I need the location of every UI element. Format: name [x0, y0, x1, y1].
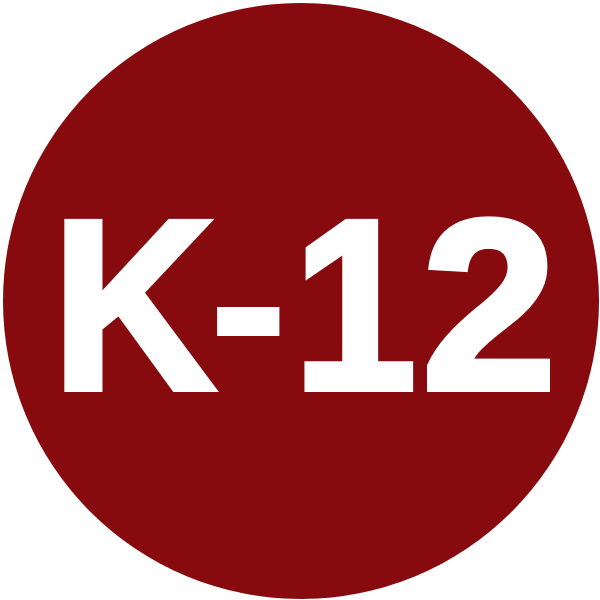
- label: K-12: 1: [293, 170, 417, 441]
- label: K-12: 2: [422, 170, 557, 441]
- label: K-12: [52, 165, 557, 441]
- label: K-12: K: [52, 169, 215, 441]
- label: K-12: -: [208, 165, 289, 436]
